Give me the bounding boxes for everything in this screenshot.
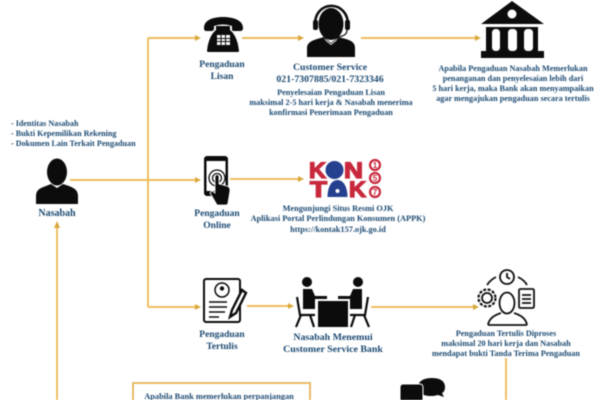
icon: bank building [481, 1, 544, 58]
text block: processing note [432, 329, 580, 358]
callout: extension box [133, 383, 310, 400]
logo: KONTAK 157: N [344, 158, 363, 183]
text block: bank note [432, 64, 594, 103]
icon: written complaint processing [478, 270, 534, 325]
text block: processing note: mendapat bukti Tanda Terima Pengaduan [432, 349, 580, 358]
connector: processing down [505, 358, 507, 400]
label: Pengaduan Lisan: Lisan [211, 72, 234, 82]
icon: chat bubbles [400, 378, 445, 400]
logo: KONTAK 157: T [310, 177, 328, 202]
text block: online note: https://kontak157.ojk.go.id [290, 225, 386, 234]
text block: customer service: maksimal 2-5 hari kerja & Nasabah menerima [249, 98, 413, 107]
logo: KONTAK 157: 1 [373, 161, 378, 170]
arrow: customer service bank to processing [371, 304, 479, 310]
connector: main vertical trunk with branches [70, 35, 201, 310]
logo: KONTAK 157: 5 [373, 174, 378, 183]
logo: KONTAK 157 [309, 158, 380, 202]
icon: smartphone with tapping hand [204, 156, 230, 205]
text block: required documents: - Dokumen Lain Terkait Pengaduan [11, 139, 136, 148]
text block: required documents: - Bukti Kepemilikan Rekening [11, 129, 116, 138]
label: Nasabah Menemui Customer Service Bank [283, 332, 383, 355]
logo: KONTAK 157: 7 [373, 188, 378, 197]
label: Pengaduan Online: Online [203, 221, 231, 231]
text block: bank note: agar mengajukan pengaduan secara tertulis [436, 94, 590, 103]
label: Pengaduan Tertulis: Pengaduan [199, 330, 245, 340]
text block: customer service: konfirmasi Penerimaan Pengaduan [269, 108, 393, 117]
label: Pengaduan Lisan [199, 60, 245, 82]
icon: customer person [36, 158, 78, 204]
label: Nasabah Menemui Customer Service Bank: Customer Service Bank [283, 344, 383, 355]
text block: customer service: Customer Service [293, 62, 368, 73]
label: Nasabah Menemui Customer Service Bank: Nasabah Menemui [293, 332, 373, 343]
text block: processing note: Pengaduan Tertulis Diproses [456, 329, 556, 338]
icon: telephone [204, 17, 243, 52]
label: Pengaduan Tertulis [199, 330, 245, 352]
text block: customer service [249, 62, 413, 117]
text block: online note [251, 204, 426, 234]
label: Pengaduan Lisan: Pengaduan [199, 60, 245, 70]
arrow: tertulis to customer service bank [247, 303, 294, 309]
text block: bank note: 5 hari kerja, maka Bank akan menyampaikan [432, 84, 594, 93]
logo: KONTAK 157: K [309, 158, 326, 183]
arrow: customer service to bank [361, 35, 481, 41]
text block: customer service: Penyelesaian Pengaduan Lisan [277, 88, 385, 97]
text block: processing note: maksimal 20 hari kerja dan Nasabah [441, 339, 571, 348]
arrow: lisan to customer service [242, 35, 304, 41]
label: Pengaduan Tertulis: Tertulis [206, 342, 238, 352]
arrow: up to nasabah [54, 221, 60, 400]
text block: bank note: penanganan dan penyelesaian lebih dari [443, 74, 584, 83]
label: Pengaduan Online [194, 209, 240, 231]
text block: online note: Mengunjungi Situs Resmi OJK [283, 204, 394, 213]
label: Pengaduan Online: Pengaduan [194, 209, 240, 219]
text block: online note: Aplikasi Portal Perlindungan Konsumen (APPK) [251, 214, 426, 223]
icon: written form with pen [204, 279, 246, 322]
text block: required documents [11, 119, 136, 148]
text block: customer service: 021-7307885/021-7323346 [276, 74, 384, 85]
arrow: online to kontak [230, 176, 304, 182]
logo: KONTAK 157: K [349, 177, 366, 202]
label: Nasabah: Nasabah [38, 208, 76, 219]
text block: bank note: Apabila Pengaduan Nasabah Memerlukan [438, 64, 588, 73]
icon: customer service agent [307, 6, 355, 57]
text block: required documents: - Identitas Nasabah [11, 119, 79, 128]
icon: two people at a table [296, 277, 369, 327]
